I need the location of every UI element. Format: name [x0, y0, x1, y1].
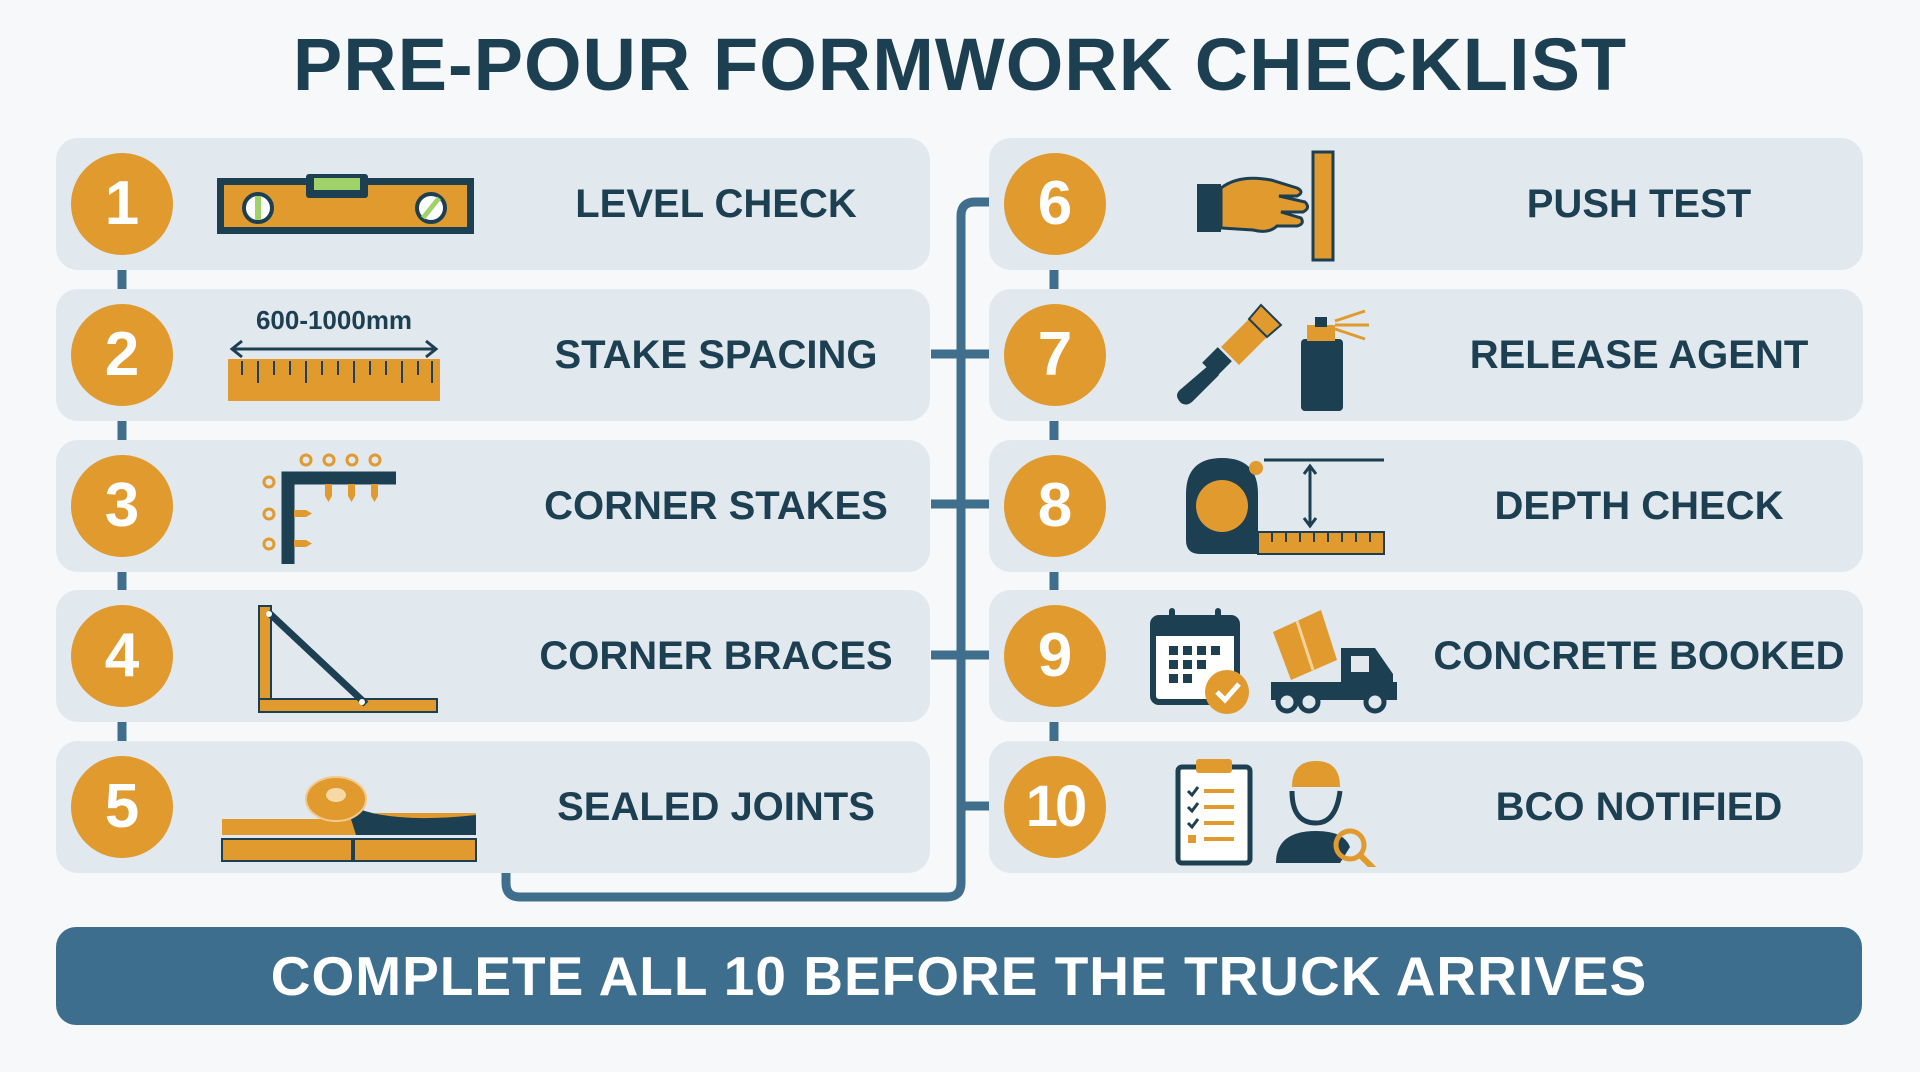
card 6: push test: 6 — [1038, 169, 1072, 238]
card 4: corner braces: 4 — [105, 621, 139, 690]
card 8: depth check: DEPTH CHECK — [1495, 484, 1783, 528]
card 1: level check — [56, 138, 930, 270]
card 1: level check: 1 — [105, 169, 139, 238]
card 5: sealed joints: 5 — [105, 772, 139, 841]
icon: tape measure — [1186, 458, 1385, 555]
title: PRE-POUR FORMWORK CHECKLIST — [293, 23, 1627, 106]
card 8: depth check: 8 — [1038, 471, 1072, 540]
icon: brush and spray can — [1177, 304, 1369, 411]
card 9: concrete booked: CONCRETE BOOKED — [1433, 634, 1845, 678]
card 6: push test — [989, 138, 1863, 270]
card 7: release agent — [989, 289, 1863, 421]
icon: tape on boards — [221, 776, 477, 862]
card 9: concrete booked: 9 — [1038, 621, 1072, 690]
card 10: BCO notified: BCO NOTIFIED — [1496, 785, 1782, 829]
card 3: corner stakes — [56, 440, 930, 572]
icon: hand pushing board — [1197, 150, 1334, 262]
icon: spirit level — [217, 174, 474, 234]
card 4: corner braces — [56, 590, 930, 722]
card 8: depth check — [989, 440, 1863, 572]
card 6: push test: PUSH TEST — [1527, 182, 1751, 226]
banner: COMPLETE ALL 10 BEFORE THE TRUCK ARRIVES — [271, 945, 1647, 1007]
card 1: level check: LEVEL CHECK — [575, 182, 857, 226]
banner — [56, 927, 1862, 1025]
card 2: stake spacing — [56, 289, 930, 421]
card 2: stake spacing: STAKE SPACING — [554, 333, 878, 377]
icon: calendar and mixer truck — [1150, 608, 1397, 714]
card 4: corner braces: CORNER BRACES — [539, 634, 893, 678]
card 7: release agent: RELEASE AGENT — [1470, 333, 1808, 377]
card 5: sealed joints — [56, 741, 930, 873]
icon: ruler with dimension: 600-1000mm — [256, 305, 412, 335]
card 9: concrete booked — [989, 590, 1863, 722]
card 2: stake spacing: 2 — [105, 320, 139, 389]
icon: ruler with dimension — [228, 305, 440, 401]
card 3: corner stakes: CORNER STAKES — [544, 484, 888, 528]
icon: brace triangle — [258, 605, 438, 713]
icon: corner with stakes — [262, 454, 396, 564]
card 10: BCO notified — [989, 741, 1863, 873]
icon: clipboard and inspector — [1176, 759, 1376, 867]
card 7: release agent: 7 — [1038, 320, 1072, 389]
card 10: BCO notified: 10 — [1026, 774, 1084, 839]
card 5: sealed joints: SEALED JOINTS — [557, 785, 875, 829]
card 3: corner stakes: 3 — [105, 471, 139, 540]
